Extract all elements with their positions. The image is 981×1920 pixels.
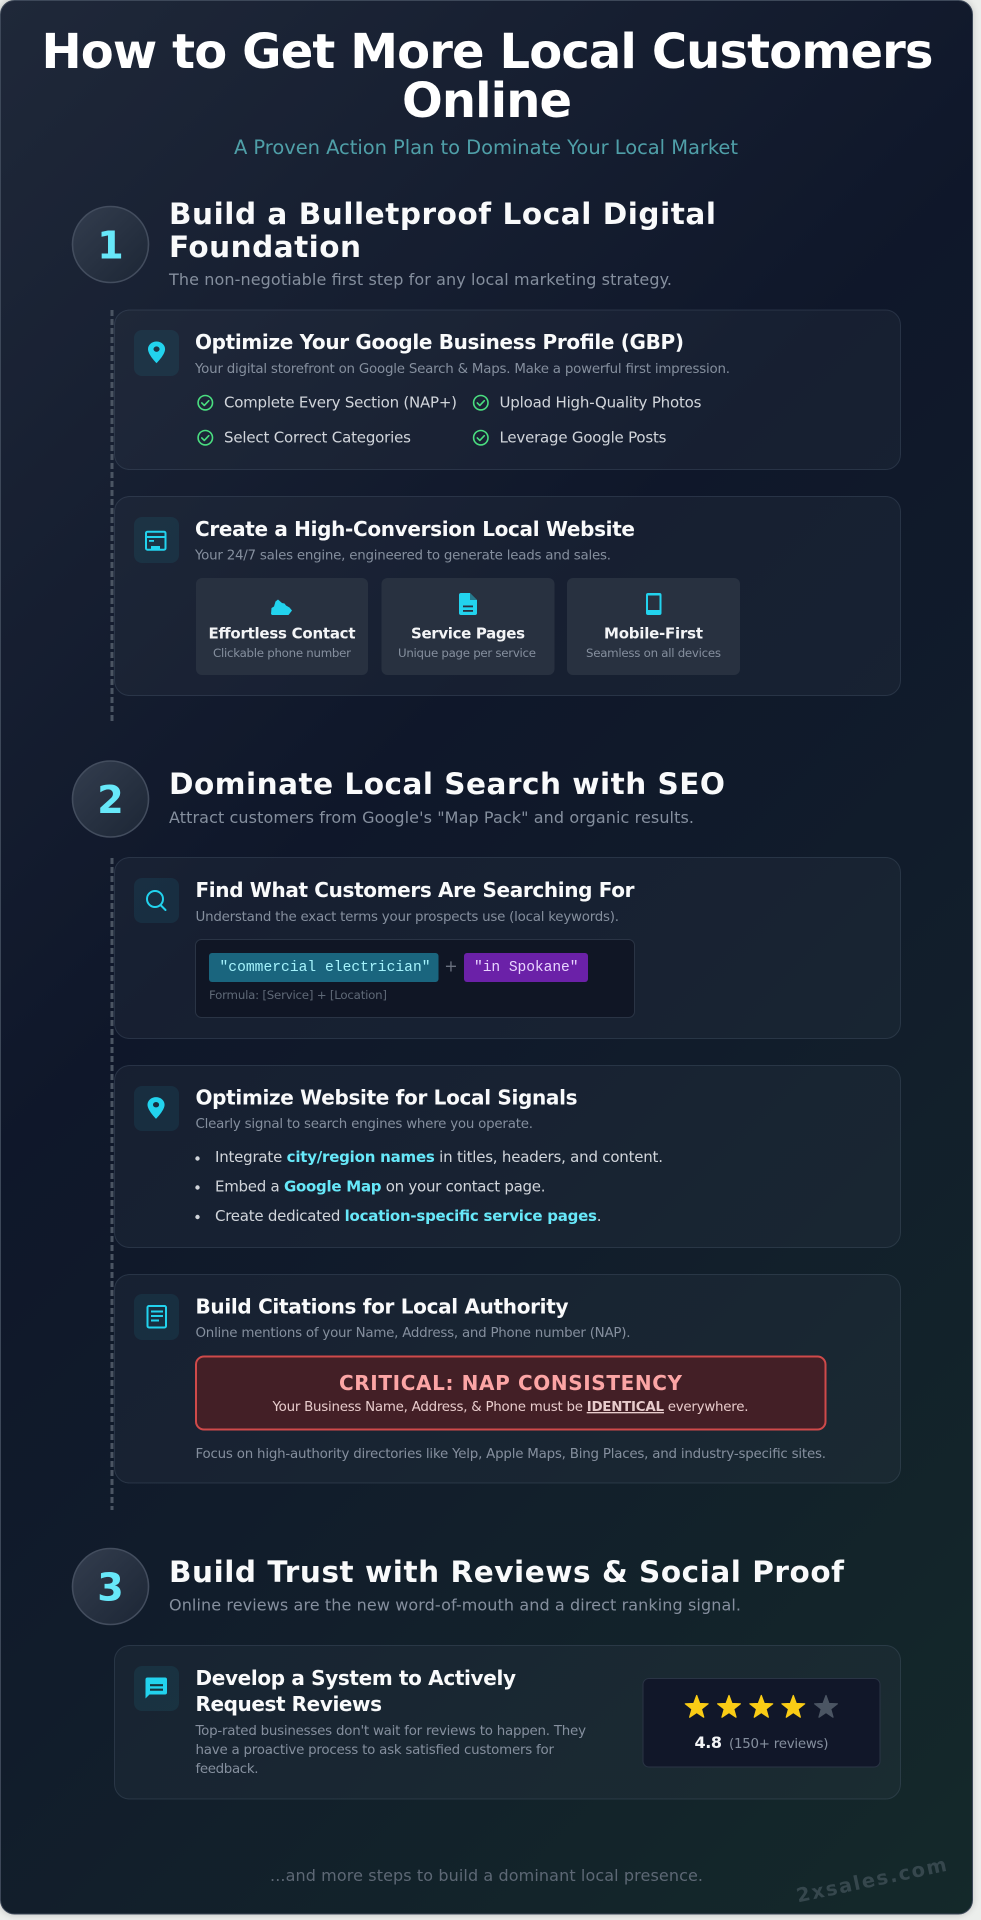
bullet list (195, 1148, 663, 1225)
feature: effortless contact: Clickable phone number (213, 646, 351, 660)
card description: Clearly signal to search engines where you operate. (196, 1117, 533, 1132)
service keyword tag (209, 953, 438, 982)
card title: Build Citations for Local Authority (196, 1294, 568, 1318)
icon: map pin (134, 1086, 179, 1131)
section 1 heading: Foundation (169, 230, 361, 264)
formula caption: Formula: [Service] + [Location] (209, 988, 387, 1002)
card description: Top-rated businesses don't wait for reviews to happen. They (194, 1724, 586, 1739)
location keyword tag (464, 953, 588, 982)
icon: chat bubble (134, 1666, 179, 1711)
section 1: digital foundation (72, 197, 900, 722)
section 2 heading: Dominate Local Search with SEO (169, 767, 725, 801)
subtitle: A Proven Action Plan to Dominate Your Local Market (234, 136, 738, 159)
section 2: local SEO (72, 761, 900, 1510)
card title: Optimize Website for Local Signals (196, 1086, 578, 1110)
step number 1: 1 (97, 224, 124, 268)
card title: Request Reviews (196, 1692, 382, 1716)
bullet list: Embed a Google Map on your contact page. (215, 1178, 546, 1196)
section 3: reviews (72, 1548, 900, 1799)
icon: map pin (134, 330, 179, 376)
card title: Develop a System to Actively (196, 1666, 516, 1690)
feature: mobile first: Seamless on all devices (586, 646, 721, 660)
card description: feedback. (196, 1762, 258, 1777)
card: on-page local signals (114, 1066, 900, 1248)
section 2 description: Attract customers from Google's "Map Pack" and organic results. (169, 808, 694, 827)
checklist: Complete Every Section (NAP+) (224, 394, 457, 412)
feature: mobile first (567, 578, 740, 675)
section 1 heading (169, 197, 716, 264)
callout: NAP consistency: Your Business Name, Address, & Phone must be IDENTICAL everywhere. (272, 1400, 748, 1415)
icon: document list (134, 1294, 179, 1340)
section 1 heading: Build a Bulletproof Local Digital (169, 197, 716, 231)
feature: service pages: Unique page per service (398, 646, 536, 660)
section 3 description: Online reviews are the new word-of-mouth and a direct ranking signal. (169, 1596, 741, 1614)
callout: NAP consistency: CRITICAL: NAP CONSISTENCY (339, 1371, 683, 1395)
rating value: 4.8 (694, 1733, 722, 1752)
checklist (198, 394, 702, 446)
icon: magnifying glass (134, 878, 179, 923)
card: local website (114, 496, 900, 696)
icon: browser window (134, 517, 179, 563)
icon: smartphone (646, 593, 662, 615)
card title (196, 1666, 516, 1716)
keyword formula box (196, 940, 634, 1018)
checklist: Leverage Google Posts (500, 428, 667, 446)
service keyword tag: "commercial electrician" (220, 960, 430, 976)
card: google business profile (114, 310, 900, 470)
feature: service pages: Service Pages (411, 624, 525, 642)
card title: Optimize Your Google Business Profile (GBP) (195, 330, 684, 354)
citation note: Focus on high-authority directories like Yelp, Apple Maps, Bing Places, and industry-specific sites. (196, 1447, 826, 1462)
checklist: Select Correct Categories (224, 428, 411, 446)
review count: (150+ reviews) (729, 1737, 828, 1752)
section 1 description: The non-negotiable first step for any local marketing strategy. (168, 270, 672, 289)
card: citations (114, 1274, 900, 1483)
card title: Find What Customers Are Searching For (196, 878, 635, 902)
callout: NAP consistency (196, 1356, 826, 1430)
feature: effortless contact: Effortless Contact (208, 624, 356, 642)
footer note: ...and more steps to build a dominant local presence. (270, 1866, 703, 1885)
feature: service pages (382, 578, 554, 675)
step number 2 (72, 761, 148, 837)
icon: document (459, 593, 477, 615)
feature: mobile first: Mobile-First (604, 624, 703, 642)
card description: Your digital storefront on Google Search & Maps. Make a powerful first impression. (194, 362, 730, 377)
card: review requests (114, 1646, 900, 1799)
checklist: Upload High-Quality Photos (500, 394, 702, 412)
card description (194, 1724, 586, 1777)
card title: Create a High-Conversion Local Website (195, 517, 635, 541)
card description: have a proactive process to ask satisfied customers for (196, 1743, 554, 1758)
step number 1 (72, 206, 148, 282)
location keyword tag: "in Spokane" (474, 960, 578, 976)
feature: effortless contact (196, 578, 368, 675)
step number 2: 2 (97, 778, 124, 822)
rating box (643, 1678, 880, 1767)
plus sign: + (444, 956, 458, 976)
section 3 heading: Build Trust with Reviews & Social Proof (169, 1555, 845, 1589)
title second line: Online (402, 73, 572, 129)
icon: contact tag (271, 600, 292, 615)
card description: Your 24/7 sales engine, engineered to generate leads and sales. (194, 548, 611, 564)
watermark: 2xsales.com (794, 1853, 949, 1907)
title: How to Get More Local Customers (42, 24, 934, 80)
step number 3: 3 (97, 1566, 124, 1610)
header (42, 24, 934, 159)
step number 3 (72, 1548, 148, 1624)
card description: Online mentions of your Name, Address, and Phone number (NAP). (196, 1326, 630, 1341)
bullet list: Create dedicated location-specific service pages. (215, 1207, 602, 1225)
star rating (685, 1696, 837, 1717)
bullet list: Integrate city/region names in titles, headers, and content. (215, 1148, 663, 1166)
card description: Understand the exact terms your prospects use (local keywords). (196, 910, 619, 925)
card: keyword research (114, 858, 900, 1038)
